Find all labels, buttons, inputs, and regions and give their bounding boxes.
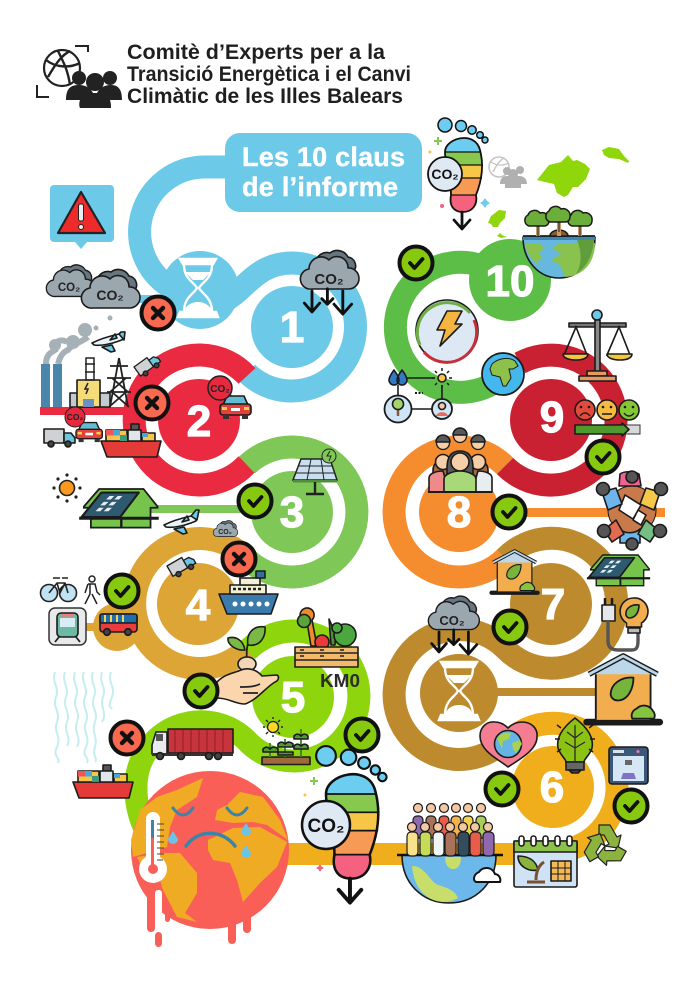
title: committee name — [127, 41, 411, 108]
path: key 10 green loop — [395, 239, 551, 392]
path: key 9 crimson loop — [505, 355, 616, 485]
icon: sun — [52, 473, 82, 503]
icon: solar house key 3 — [79, 489, 159, 528]
heading box: les 10 claus de l'informe: de l’informe — [242, 172, 398, 202]
heading box: les 10 claus de l'informe: Les 10 claus — [242, 142, 405, 172]
icon: small carbon footprint: CO₂ — [431, 166, 459, 182]
icon: solar house key 7 — [587, 555, 650, 586]
decor: sparkles — [304, 137, 490, 872]
icon: bicycle — [40, 578, 76, 602]
icon: hand holding seedling — [217, 627, 278, 704]
icon: factory with smoke — [41, 316, 131, 407]
icon: big carbon footprint: CO₂ — [308, 816, 344, 837]
numbers on each key: 7 — [541, 580, 565, 629]
icon: mood faces with progress arrow — [575, 400, 640, 436]
icon: plug and leaf bulb — [602, 598, 648, 650]
icon: container truck — [152, 729, 233, 760]
numbers on each key: 8 — [447, 488, 471, 537]
path: key 7 brown loop — [394, 538, 617, 760]
icon: car with CO2 badge: CO₂ — [210, 384, 230, 395]
path: key 2 red loop — [40, 355, 247, 485]
title: committee name: Transició Energètica i el Canvi — [127, 63, 411, 86]
icon: vegetable crate — [295, 608, 358, 667]
icon: team around table — [596, 471, 668, 550]
path: key 5 lime loop — [136, 631, 359, 835]
icon: small carbon footprint — [428, 118, 490, 229]
icon: calendar with plant — [514, 836, 577, 887]
label: KM0: KM0 — [320, 671, 360, 691]
icon: plane key 4 — [164, 510, 199, 534]
icon: CO2 cloud key 7 — [428, 596, 479, 654]
icon: car with CO2 badge — [208, 376, 251, 419]
icon: pedestrian — [85, 576, 100, 604]
icon: small car with CO2 — [65, 407, 102, 442]
icon: recycle arrows — [579, 825, 626, 870]
numbers on each key: 9 — [540, 393, 564, 442]
icon: small globe — [482, 353, 524, 395]
numbers on each key: 10 — [486, 257, 534, 306]
icon: earth in heart — [480, 722, 537, 767]
numbers on each key — [186, 257, 565, 812]
icon: two CO2 clouds: CO₂ — [58, 282, 80, 294]
icon: hourglass key 7 — [439, 662, 479, 720]
numbers on each key: 5 — [281, 673, 305, 722]
icon: half earth with trees — [523, 206, 595, 278]
icon: 3D printer — [609, 747, 648, 784]
icon: two CO2 clouds — [46, 265, 140, 308]
icon: people on earth — [397, 804, 503, 903]
logo: experts globe and people — [37, 46, 122, 108]
icon: truck bottom left — [44, 429, 75, 447]
icon: heat waves — [54, 672, 113, 763]
icon: truck key 4 — [167, 553, 197, 579]
numbers on each key: 4 — [186, 581, 211, 630]
numbers on each key: 3 — [280, 488, 304, 537]
icon: plane — [92, 332, 125, 352]
icon: citizens group — [428, 428, 492, 492]
path: gold bar linking earth to key 6 — [280, 843, 520, 865]
path: key 1 blue loop — [133, 167, 355, 391]
icon: two CO2 clouds: CO₂ — [96, 287, 124, 303]
numbers on each key: 6 — [540, 763, 564, 812]
icon: alert bubble — [50, 185, 114, 249]
icon: solar panel — [293, 449, 337, 494]
icon: energy cycle bolt — [416, 300, 478, 362]
icon: small CO2 cloud — [213, 520, 238, 537]
icon: CO2 cloud key 7: CO₂ — [439, 613, 465, 628]
title: committee name: Comitè d’Experts per a la — [127, 41, 385, 64]
icon: small car with CO2: CO₂ — [67, 412, 83, 422]
icon: network of water, sun, tree, person — [384, 368, 452, 422]
icon: balance scales — [563, 310, 632, 381]
icon: CO2 cloud with down arrows — [300, 250, 359, 314]
path: key 3 green loop — [150, 447, 357, 577]
numbers on each key: 1 — [280, 303, 304, 352]
title: committee name: Climàtic de les Illes Balears — [127, 85, 403, 108]
icon: delivery truck — [134, 352, 163, 379]
icon: small CO2 cloud: CO₂ — [218, 529, 232, 536]
numbers on each key: 2 — [187, 397, 211, 446]
icon: thermometer — [139, 812, 167, 930]
icon: eco house small — [492, 551, 538, 593]
icon: bus — [100, 614, 137, 635]
icon: eco house big — [587, 656, 660, 722]
icon: hourglass key 1 — [178, 259, 218, 317]
icon: big carbon footprint — [302, 746, 389, 903]
icon: cargo ship key 2 — [101, 424, 161, 457]
icon: faint logo watermark — [489, 157, 527, 188]
icon: leaf lightbulb — [555, 718, 595, 773]
icon: CO2 cloud with down arrows: CO₂ — [314, 271, 344, 288]
path: key 8 orange loop — [394, 447, 665, 577]
map: Balearic Islands — [488, 147, 629, 238]
icon: cargo ship key 5 — [73, 765, 133, 798]
path: key 4 amber loop — [85, 538, 247, 668]
icon: cruise ship — [219, 571, 278, 614]
badges: negative cross marks — [110, 296, 256, 754]
illustration: melting crying earth — [131, 771, 289, 947]
icon: sun and seedlings — [262, 717, 310, 764]
badges: positive check marks — [106, 246, 648, 822]
icon: train tile — [49, 608, 86, 645]
path: key 6 gold loop — [505, 723, 617, 849]
heading box: les 10 claus de l'informe — [225, 133, 422, 212]
